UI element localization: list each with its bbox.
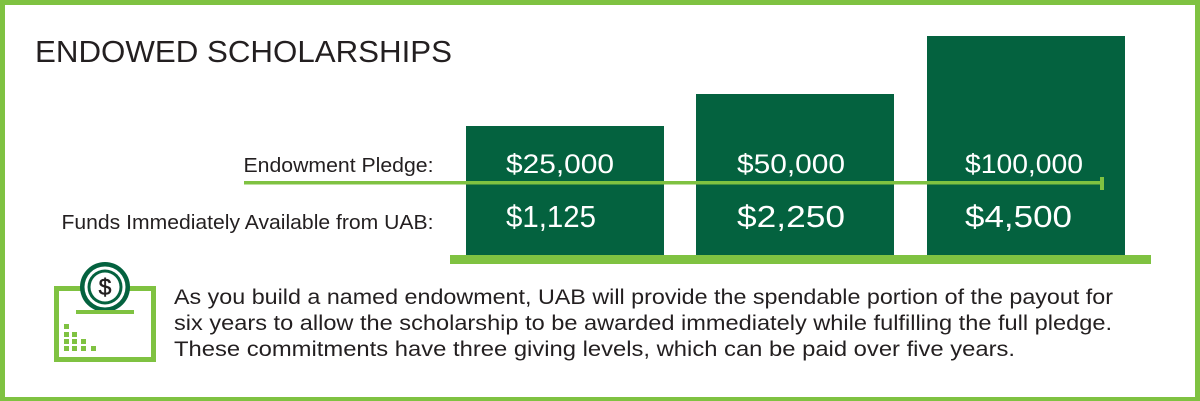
description text: These commitments have three giving levels, which can be paid over five years.: [174, 338, 1015, 361]
bar: $25,000 level: [466, 126, 664, 255]
available funds: $2,250: $2,250: [737, 199, 845, 234]
icon: coin dropping into slot: [56, 262, 154, 360]
description text: [174, 286, 1113, 361]
title: ENDOWED SCHOLARSHIPS: [35, 34, 452, 69]
description text: six years to allow the scholarship to be awarded immediately while fulfilling the full pledge.: [174, 312, 1112, 335]
description text: As you build a named endowment, UAB will provide the spendable portion of the payout for: [174, 286, 1113, 309]
bar: $100,000 level: [927, 36, 1125, 255]
icon: coin dropping into slot: $: [99, 274, 112, 300]
chart baseline: [450, 255, 1151, 264]
pledge line with end tick: [244, 177, 1104, 190]
bar chart: giving levels: [244, 36, 1151, 264]
available funds: $4,500: $4,500: [965, 199, 1072, 234]
row label: funds immediately available: Funds Immediately Available from UAB:: [62, 212, 434, 234]
available funds: $1,125: $1,125: [506, 199, 596, 234]
bar: $50,000 level: [696, 94, 894, 255]
row label: endowment pledge: Endowment Pledge:: [244, 155, 434, 177]
pledge amount: $50,000: $50,000: [737, 149, 845, 179]
pledge amount: $100,000: $100,000: [965, 149, 1083, 179]
pledge amount: $25,000: $25,000: [506, 149, 614, 179]
